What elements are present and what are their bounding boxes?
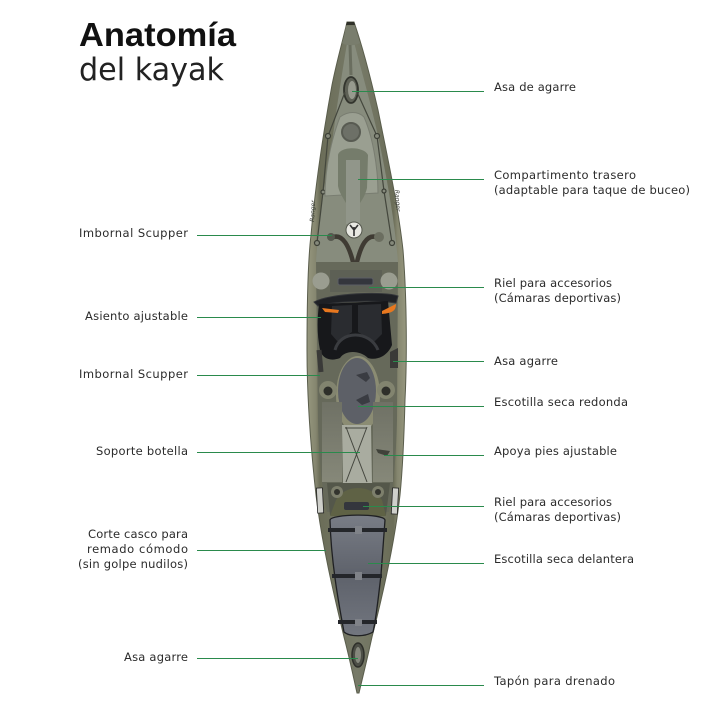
title: Anatomía — [79, 16, 237, 53]
bow tip cap — [346, 22, 355, 25]
logo disc — [346, 222, 362, 238]
leader lines — [197, 92, 484, 686]
hull names: Ranger — [309, 200, 317, 222]
kayak illustration: Ranger — [393, 190, 402, 212]
labels left — [78, 226, 188, 664]
front hatch — [328, 515, 387, 636]
footwell panels and bottle holder — [322, 402, 393, 484]
title — [79, 16, 237, 88]
seat-front Y straps — [331, 237, 379, 271]
bow section — [327, 483, 390, 515]
labels right: Riel para accesorios — [494, 495, 612, 509]
round pads — [312, 272, 330, 290]
hull outline — [307, 22, 406, 693]
deck rear — [316, 26, 398, 262]
labels left: Imbornal Scupper — [79, 367, 188, 381]
grip handle rear — [344, 77, 358, 103]
accessory rail rear — [338, 278, 373, 285]
seat — [314, 293, 398, 360]
kayak illustration — [307, 22, 406, 693]
title: del kayak — [79, 52, 224, 88]
grip handle front — [352, 643, 364, 667]
labels right: (adaptable para taque de buceo) — [494, 183, 690, 197]
scupper drains — [319, 381, 337, 399]
labels right: Tapón para drenado — [493, 674, 615, 688]
labels left: Imbornal Scupper — [79, 226, 188, 240]
deck bungee lines rear — [317, 92, 392, 243]
labels left: Asa agarre — [124, 650, 188, 664]
labels right: Escotilla seca redonda — [494, 395, 628, 409]
round hatch — [336, 356, 380, 434]
labels right — [493, 80, 690, 688]
labels right: Compartimento trasero — [494, 168, 636, 182]
grab handles mid — [319, 350, 321, 372]
labels left: Asiento ajustable — [85, 309, 188, 323]
labels left: Corte casco para — [88, 527, 188, 541]
hull stickers — [316, 488, 399, 514]
labels left: remado cómodo — [87, 542, 188, 556]
labels right: Apoya pies ajustable — [494, 444, 617, 458]
labels right: Riel para accesorios — [494, 276, 612, 290]
labels left: (sin golpe nudilos) — [78, 557, 188, 571]
labels right: Asa de agarre — [494, 80, 576, 94]
labels right: Asa agarre — [494, 354, 558, 368]
labels right: (Cámaras deportivas) — [494, 510, 621, 524]
accessory rail front — [344, 502, 369, 510]
rear compartment — [325, 112, 378, 224]
mid cockpit floor — [316, 262, 398, 512]
labels right: Escotilla seca delantera — [494, 552, 634, 566]
labels right: (Cámaras deportivas) — [494, 291, 621, 305]
labels left: Soporte botella — [96, 444, 188, 458]
